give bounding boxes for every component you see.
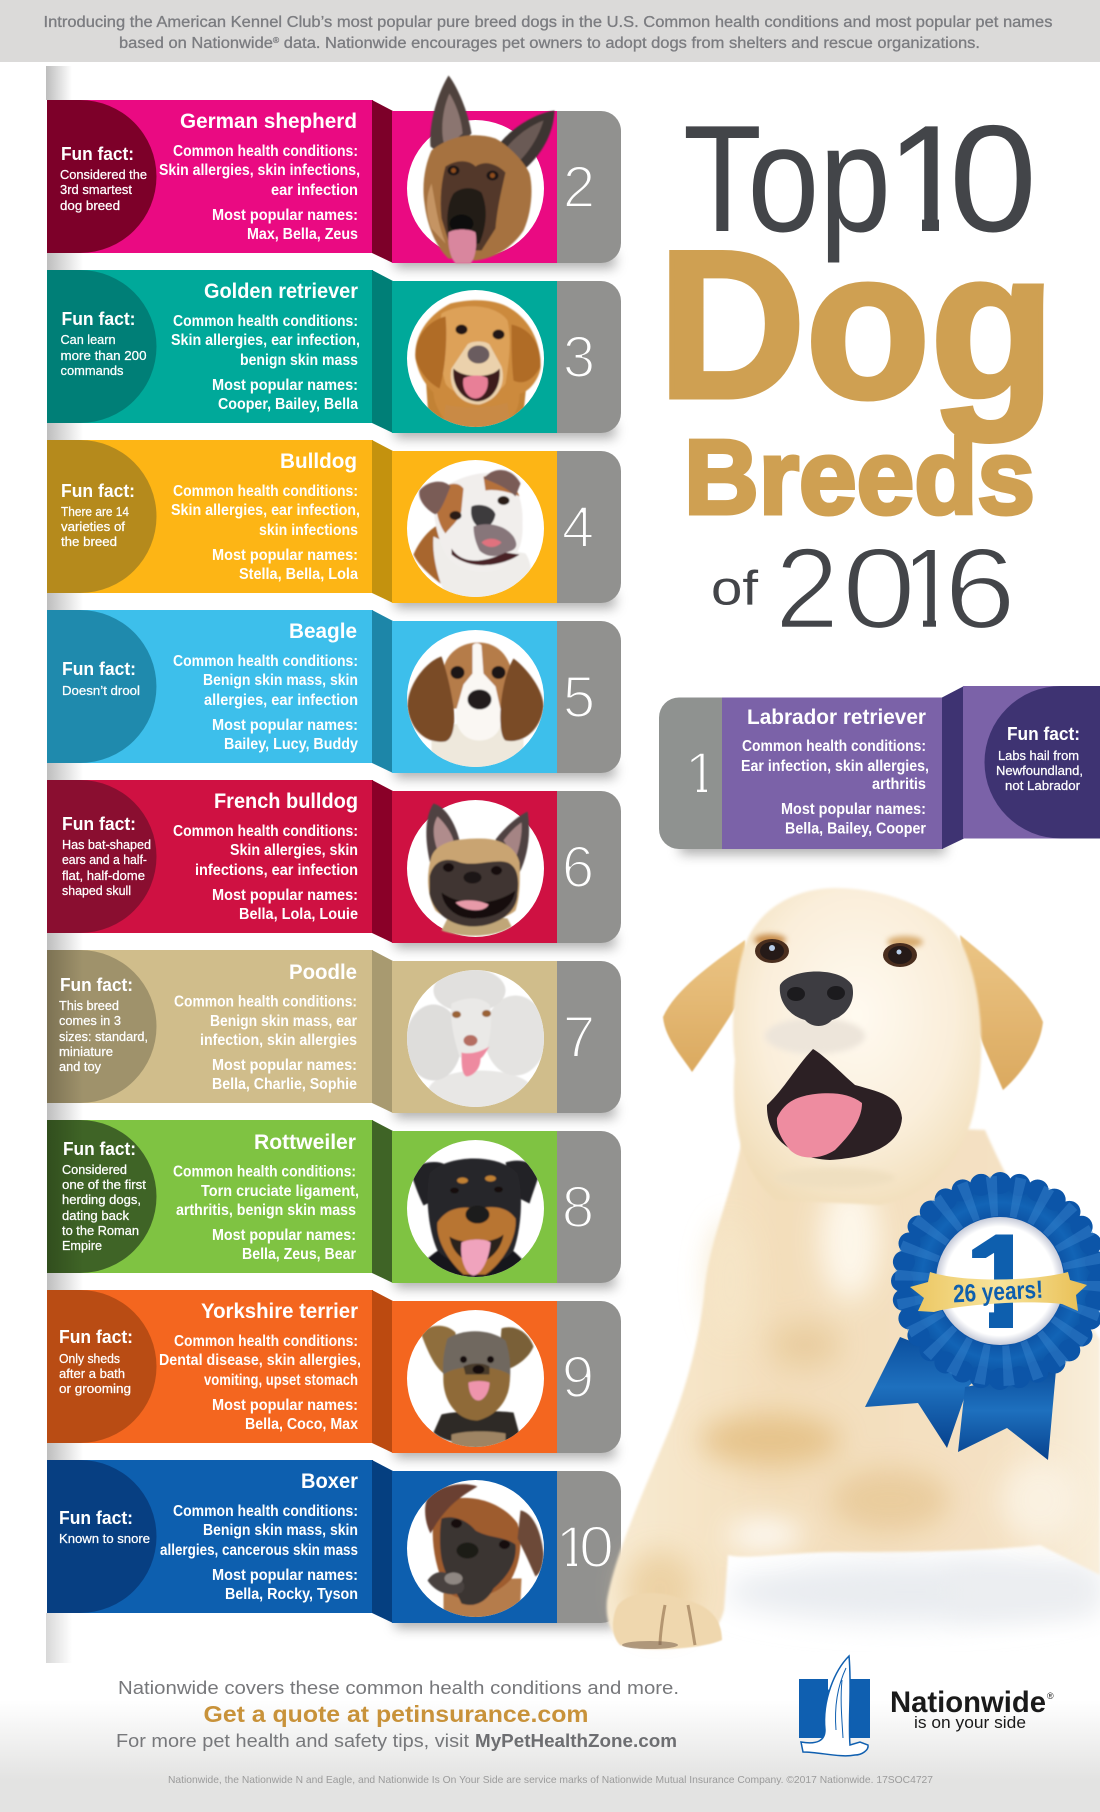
panel: French bulldog rank 6: 6 [562,835,594,900]
panel: Golden retriever rank 3: Most popular names: [212,377,358,394]
panel: Golden retriever rank 3: Skin allergies, ear infection, [171,332,360,349]
title: Top 10 Dog Breeds of 2016: Top [683,94,891,264]
panel: Golden retriever rank 3: more than 200 [60,348,146,363]
title: Top 10 Dog Breeds of 2016: of [711,562,759,616]
panel: Beagle rank 5: Beagle [289,620,357,643]
panel: Bulldog rank 4: There are 14 [61,504,129,519]
panel: Rottweiler rank 8: Considered [62,1162,127,1177]
white disc [936,1217,1064,1345]
panel: Yorkshire terrier rank 9: Bella, Coco, Max [245,1416,358,1433]
panel: Golden retriever rank 3: benign skin mass [240,352,358,369]
header intro banner: ® [273,36,279,45]
panel: German shepherd rank 2: German shepherd [180,110,357,133]
panel: Boxer rank 10: Common health conditions: [173,1503,358,1520]
logo text: Nationwide is on your side: ® [1047,1691,1054,1701]
panel: Beagle rank 5: allergies, ear infection [204,692,358,709]
footer call to action text: MyPetHealthZone.com [475,1731,677,1751]
panel: Rottweiler rank 8: herding dogs, [62,1192,141,1207]
header intro banner: Introducing the American Kennel Club’s most popular pure breed dogs in the U.S. Common health conditions and most popular pet names [44,14,1053,31]
logo text: Nationwide is on your side: Nationwide [890,1686,1046,1719]
panel: French bulldog rank 6: flat, half-dome [62,868,145,883]
panel: Boxer rank 10: 0 [579,1515,614,1580]
panel: Rottweiler rank 8: Common health conditions: [173,1164,356,1180]
footer call to action text [116,1678,679,1751]
title: Top 10 Dog Breeds of 2016: Breeds [684,418,1035,536]
panel: Golden retriever rank 3: commands [60,363,124,378]
panel: Bulldog rank 4: 4 [562,495,594,560]
icon: golden retriever portrait [415,300,541,434]
header intro banner: data. Nationwide encourages pet owners to adopt dogs from shelters and rescue organizations. [279,35,980,52]
panel: Beagle rank 5: Common health conditions: [173,653,358,670]
panel: German shepherd rank 2: Considered the [60,167,147,182]
nose [780,971,853,1026]
mouth [767,1049,902,1160]
panel: Beagle rank 5: Most popular names: [212,717,358,734]
panel: Rottweiler rank 8: Most popular names: [212,1227,356,1244]
panel: Boxer rank 10: allergies, cancerous skin mass [160,1542,358,1559]
panel: Rottweiler rank 8: Empire [62,1238,102,1253]
ribbon tails [865,1337,985,1448]
panel: Labrador retriever rank 1: Most popular names: [781,801,926,818]
panel: Beagle rank 5 [47,610,621,778]
panel: Labrador retriever rank 1: arthritis [872,776,926,793]
panel: French bulldog rank 6: ears and a half- [62,852,147,867]
eyebrow and muzzle tint [754,934,923,1188]
panel: Bulldog rank 4 [47,440,621,608]
panel: Rottweiler rank 8: Torn cruciate ligament, [201,1183,359,1200]
floor reflection under big dog [725,1562,1100,1622]
panel: German shepherd rank 2: 2 [563,155,595,220]
title: Top 10 Dog Breeds of 2016: 0 [949,94,1037,264]
panel: French bulldog rank 6: French bulldog [214,790,358,813]
panel: German shepherd rank 2: dog breed [60,198,120,213]
panel: Rottweiler rank 8 [47,1120,621,1288]
title: Top 10 Dog Breeds of 2016: Dog [658,207,1055,442]
panel: Boxer rank 10 [47,1460,621,1628]
panel: Poodle rank 7: Common health conditions: [174,994,357,1010]
panel: Rottweiler rank 8: Rottweiler [254,1131,356,1154]
panel: German shepherd rank 2: Fun fact: [61,144,134,164]
panel: Golden retriever rank 3: Golden retriever [204,280,358,303]
panel: Yorkshire terrier rank 9: Dental disease, skin allergies, [159,1352,361,1369]
panel: Poodle rank 7: infection, skin allergies [200,1032,357,1049]
panel: Labrador retriever rank 1: Common health conditions: [742,738,926,755]
panel: Golden retriever rank 3: Cooper, Bailey, Bella [218,396,358,413]
paw [613,1593,722,1649]
panel: Bulldog rank 4: the breed [61,534,117,549]
panel: Poodle rank 7: Fun fact: [60,975,133,995]
panel: French bulldog rank 6: Fun fact: [62,814,136,834]
panel: German shepherd rank 2: Skin allergies, skin infections, [159,162,360,179]
icon: boxer portrait [425,1484,544,1624]
logo text: Nationwide is on your side: is on your side [914,1713,1026,1732]
panel: German shepherd rank 2: Common health conditions: [173,143,358,160]
panel: Poodle rank 7: sizes: standard, [59,1029,148,1044]
gold banner [910,1272,1087,1312]
panel: Boxer rank 10: Fun fact: [59,1508,133,1528]
panel: Bulldog rank 4: varieties of [61,519,125,534]
panel: Yorkshire terrier rank 9: Yorkshire terrier [201,1300,358,1323]
panel: Golden retriever rank 3: Can learn [60,332,116,347]
panel: Beagle rank 5: Doesn’t drool [62,683,140,698]
panel: Poodle rank 7: comes in 3 [59,1013,121,1028]
panel: Labrador retriever rank 1: Ear infection, skin allergies, [741,758,929,775]
icon: French bulldog portrait [426,804,529,936]
panel: Poodle rank 7: miniature [59,1044,113,1059]
panel: Poodle rank 7: 7 [563,1005,595,1070]
header intro banner: based on Nationwide [119,35,264,52]
head [733,888,981,1205]
panel: Labrador retriever rank 1: Labrador retriever [747,706,926,729]
panel: Yorkshire terrier rank 9: or grooming [59,1381,131,1396]
panel: French bulldog rank 6: shaped skull [62,883,131,898]
panel: Beagle rank 5: Benign skin mass, skin [203,672,358,689]
panel: Poodle rank 7: Most popular names: [212,1057,357,1074]
panel: German shepherd rank 2: 3rd smartest [60,182,132,197]
title: Top 10 Dog Breeds of 2016: 0 [842,525,916,653]
panel: Poodle rank 7: and toy [59,1059,101,1074]
panel: French bulldog rank 6: Has bat-shaped [62,837,151,852]
page background footer gradient [0,1700,1100,1780]
banner text: 26 years! [952,1276,1044,1308]
footer call to action text: Nationwide covers these common health conditions and more. [118,1678,679,1698]
panel: Boxer rank 10: Bella, Rocky, Tyson [225,1586,358,1603]
panel: Yorkshire terrier rank 9: vomiting, upset stomach [204,1372,358,1389]
panel: Rottweiler rank 8: 8 [562,1175,594,1240]
panel: Yorkshire terrier rank 9 [47,1290,621,1458]
panel: Yorkshire terrier rank 9: Common health conditions: [174,1333,358,1350]
panel: Rottweiler rank 8: one of the first [62,1177,146,1192]
panel: Boxer rank 10: 1 [556,1515,588,1580]
panel: French bulldog rank 6: infections, ear infection [195,862,358,879]
panel: French bulldog rank 6: Skin allergies, skin [230,842,358,859]
icon: poodle portrait [406,968,546,1110]
icon: German shepherd portrait [423,76,554,264]
legal fine print: Nationwide, the Nationwide N and Eagle, and Nationwide Is On Your Side are service marks of Nationwide Mutual Insurance Company. ©2017 Nationwide. 17SOC4727 [168,1774,933,1786]
panel: Yorkshire terrier rank 9: Most popular names: [212,1397,358,1414]
panel: Labrador retriever rank 1: not Labrador [1005,778,1081,793]
panel: Poodle rank 7 [47,950,621,1118]
footer call to action text: Get a quote at petinsurance.com [204,1701,588,1727]
panel: Labrador retriever rank 1: Newfoundland, [996,763,1083,778]
panel: Beagle rank 5: Fun fact: [62,659,136,679]
panel: Poodle rank 7: Bella, Charlie, Sophie [212,1076,357,1093]
fur shading [624,1180,1080,1630]
panel: Bulldog rank 4: Most popular names: [212,547,358,564]
numeral one: 1 [964,1208,1038,1356]
icon: bulldog portrait [414,470,531,604]
right ear [960,935,1043,1090]
eyes [755,939,789,963]
panel: Rottweiler rank 8: to the Roman [62,1223,139,1238]
panel: Golden retriever rank 3 [47,270,621,438]
icon: Yorkshire terrier portrait [420,1326,534,1454]
icon: Rottweiler portrait [410,1158,540,1284]
panel: Labrador retriever rank 1: 1 [685,741,717,806]
logo: Nationwide N and eagle [799,1656,870,1756]
panel: Yorkshire terrier rank 9: after a bath [59,1366,125,1381]
panel: Poodle rank 7: Benign skin mass, ear [210,1013,357,1030]
panel: French bulldog rank 6: Bella, Lola, Louie [239,906,358,923]
header intro banner [0,0,1100,62]
panel: Rottweiler rank 8: dating back [62,1208,129,1223]
panel: Yorkshire terrier rank 9: 9 [562,1345,594,1410]
panel: Labrador retriever rank 1: Bella, Bailey, Cooper [785,820,926,838]
panel: Golden retriever rank 3: Common health conditions: [173,313,358,330]
panel: Bulldog rank 4: Bulldog [280,450,357,473]
title: Top 10 Dog Breeds of 2016: 6 [944,525,1016,653]
left ear [663,940,748,1072]
panel: Labrador retriever rank 1 [659,686,1100,854]
panel: Bulldog rank 4: Skin allergies, ear infection, [171,502,360,519]
panel: German shepherd rank 2: Max, Bella, Zeus [247,226,358,243]
rosette [902,1183,1098,1379]
panel: Rottweiler rank 8: arthritis, benign skin mass [176,1202,356,1219]
panel: Yorkshire terrier rank 9: Fun fact: [59,1327,133,1347]
panel: German shepherd rank 2: Most popular names: [212,207,358,224]
panel: Rottweiler rank 8: Fun fact: [63,1139,136,1159]
panel: Rottweiler rank 8: Bella, Zeus, Bear [242,1246,356,1263]
title: Top 10 Dog Breeds of 2016: 1 [886,94,971,264]
panel: German shepherd rank 2: ear infection [271,182,358,199]
panel: Golden retriever rank 3: Fun fact: [62,309,136,329]
title: Top 10 Dog Breeds of 2016: 1 [897,525,961,653]
tongue [777,1093,862,1158]
panel: Labrador retriever rank 1: Labs hail from [998,748,1079,763]
badge: blue ribbon 26 years [865,1183,1098,1460]
left edge ribbon shadow [46,66,83,1663]
panel: Yorkshire terrier rank 9: Only sheds [59,1351,120,1366]
panel: Golden retriever rank 3: 3 [563,325,595,390]
icon: beagle portrait [408,642,544,774]
panel: French bulldog rank 6: Most popular names: [212,887,358,904]
panel: German shepherd rank 2 [47,100,621,268]
dog body [607,1120,1100,1648]
panel: Boxer rank 10: Boxer [301,1470,358,1493]
panel: Poodle rank 7: Poodle [289,961,357,984]
title: Top 10 Dog Breeds of 2016 [669,124,1044,628]
panel: Labrador retriever rank 1: Fun fact: [1007,724,1080,744]
panel: Bulldog rank 4: Fun fact: [61,481,135,501]
panel: Boxer rank 10: Benign skin mass, skin [203,1522,358,1539]
logo text: Nationwide is on your side [890,1686,1054,1732]
panel: French bulldog rank 6: Common health conditions: [173,823,358,840]
panel: Bulldog rank 4: Common health conditions: [173,483,358,500]
panel: French bulldog rank 6 [47,780,621,948]
panel: Bulldog rank 4: Stella, Bella, Lola [239,566,358,583]
panel: Beagle rank 5: 5 [563,665,595,730]
footer call to action text: For more pet health and safety tips, visit [116,1731,469,1751]
illustration: big Labrador dog [607,888,1100,1649]
title: Top 10 Dog Breeds of 2016: 2 [775,525,839,653]
panel: Beagle rank 5: Bailey, Lucy, Buddy [224,736,358,753]
panel: Bulldog rank 4: skin infections [259,522,358,539]
panel: Poodle rank 7: This breed [59,998,119,1013]
panel: Boxer rank 10: Known to snore [59,1531,150,1546]
panel: Boxer rank 10: Most popular names: [212,1567,358,1584]
